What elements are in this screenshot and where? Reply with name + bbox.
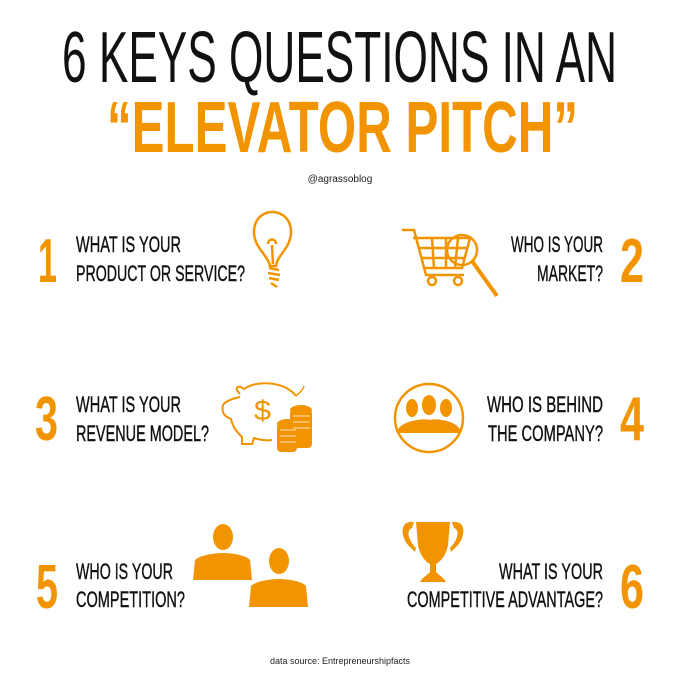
item 3 <box>35 385 209 454</box>
item 3: REVENUE MODEL? <box>76 421 209 446</box>
icon: two businessmen <box>193 524 308 607</box>
item 4: WHO IS BEHIND <box>487 392 603 417</box>
item 2: MARKET? <box>537 261 603 286</box>
item 3: 3 <box>35 385 58 454</box>
icon: piggy bank with coins: $ <box>254 395 271 426</box>
item 3: WHAT IS YOUR <box>76 392 181 417</box>
item 2 <box>511 227 644 296</box>
item 5: COMPETITION? <box>76 587 185 612</box>
item 5: WHO IS YOUR <box>76 559 173 584</box>
handle: @agrassoblog <box>308 174 372 185</box>
icon: trophy <box>403 522 463 582</box>
item 5 <box>36 553 185 622</box>
icon: cart with magnifier <box>402 230 497 296</box>
item 4: 4 <box>620 385 644 454</box>
item 6 <box>407 553 644 622</box>
item 1 <box>38 227 245 296</box>
item 4: THE COMPANY? <box>488 421 603 446</box>
item 5: 5 <box>36 553 58 622</box>
icon: light bulb <box>254 212 291 287</box>
item 2: 2 <box>620 227 644 296</box>
item 2: WHO IS YOUR <box>511 232 603 257</box>
icon: team in circle <box>395 384 463 452</box>
item 6: 6 <box>620 553 644 622</box>
icon: piggy bank with coins <box>223 383 312 452</box>
footer: data source: data source: Entrepreneurshipfacts <box>270 656 411 666</box>
item 4 <box>487 385 644 454</box>
item 1: PRODUCT OR SERVICE? <box>76 261 245 286</box>
item 1: WHAT IS YOUR <box>76 232 181 257</box>
item 1: 1 <box>38 227 57 296</box>
item 6: WHAT IS YOUR <box>499 559 603 584</box>
